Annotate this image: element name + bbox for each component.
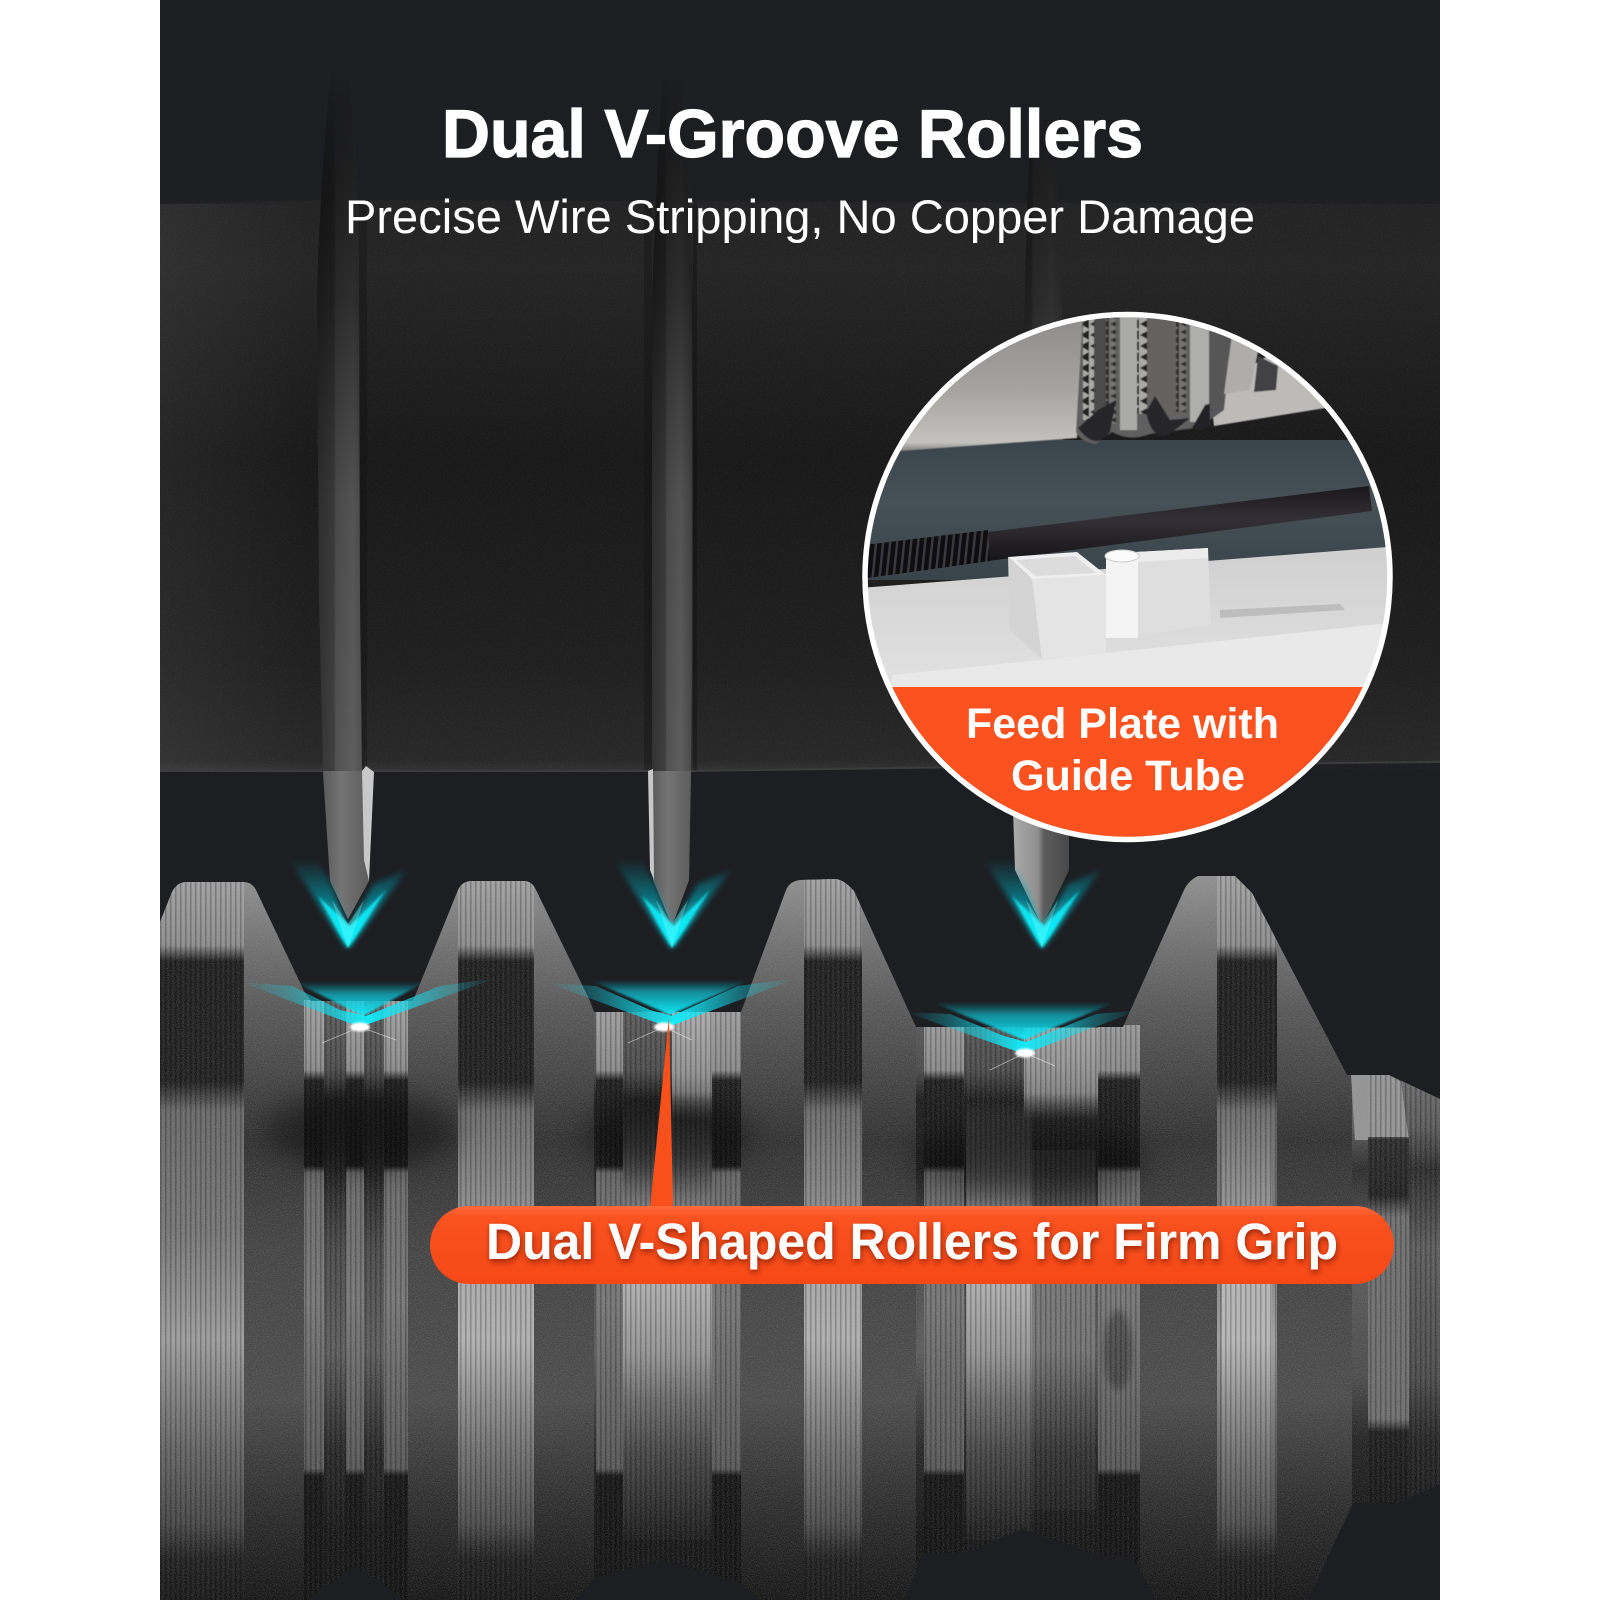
upper roller body	[160, 200, 1440, 771]
flanges	[160, 870, 1277, 1600]
inset caption band	[892, 687, 1363, 837]
soft shadow in groove 3	[910, 1124, 1150, 1196]
inset caption line 2: Guide Tube	[1011, 752, 1245, 800]
groove 1	[304, 1000, 408, 1600]
title: Dual V-Groove Rollers	[442, 96, 1143, 172]
lower roller	[160, 870, 1440, 1600]
groove 2	[594, 1010, 741, 1600]
right stub	[1351, 1075, 1440, 1515]
cyan arrow 3	[982, 858, 1101, 948]
subtitle: Precise Wire Stripping, No Copper Damage	[345, 190, 1255, 243]
upper blade 3	[1013, 120, 1069, 926]
inset photo: teal surface	[860, 440, 1400, 580]
cyan arrow 1	[288, 858, 407, 948]
groove 3	[916, 1025, 1140, 1600]
callout: orange pointer and pill	[430, 1017, 1394, 1284]
soft shadow in groove 1	[265, 1090, 455, 1170]
background panel	[160, 0, 1440, 1600]
inset caption line 1: Feed Plate with	[966, 700, 1279, 748]
soft shadow in groove 2	[583, 1097, 753, 1173]
inset photo: black wire	[864, 486, 1372, 578]
cyan arrow 2	[612, 858, 731, 948]
inset circle: feed plate with guide tube	[860, 310, 1400, 857]
callout text: Dual V-Shaped Rollers for Firm Grip	[486, 1213, 1338, 1270]
inset photo: silver roller assembly	[900, 317, 1326, 452]
upper blade 1	[317, 70, 374, 919]
upper blade 2	[648, 80, 693, 926]
inset white ring	[865, 314, 1390, 840]
inset photo: white guide boxes	[1008, 548, 1211, 659]
contact chevron 3	[905, 1002, 1140, 1070]
contact chevron 2	[548, 978, 798, 1043]
inset photo: white plate	[860, 546, 1400, 690]
stripe texture on flanges and columns	[160, 870, 1440, 1600]
contact chevron 1	[240, 978, 497, 1043]
